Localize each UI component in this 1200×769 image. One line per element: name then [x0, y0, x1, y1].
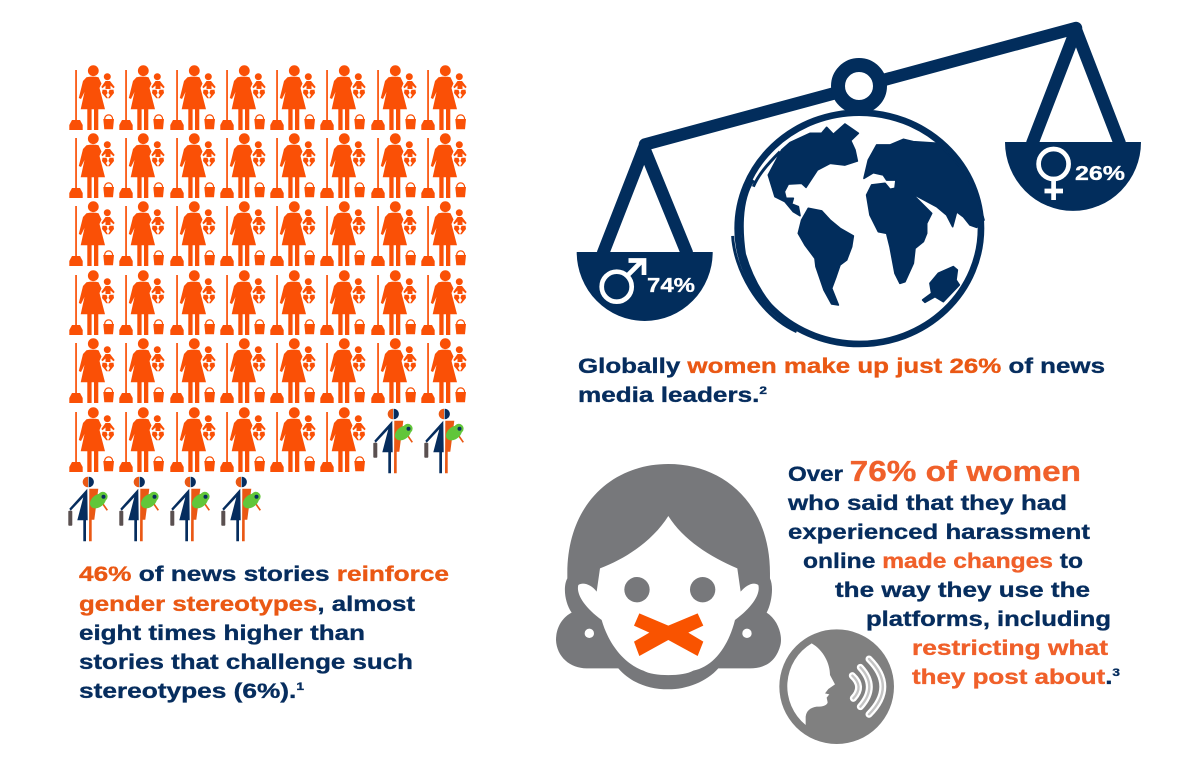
scale with globe illustration	[577, 28, 1141, 344]
male symbol	[602, 260, 644, 302]
female symbol	[1039, 149, 1069, 200]
hair and head silhouette	[556, 464, 781, 689]
text block: online harassment statistic: who said that they had	[787, 492, 1067, 515]
text block: online harassment statistic: restricting what	[912, 637, 1108, 660]
text block: online harassment statistic: platforms, including	[866, 608, 1111, 631]
text block: online harassment statistic	[787, 456, 1120, 689]
text block: news media leaders statistic: Globally women make up just 26% of news	[578, 355, 1105, 378]
label: 74%: 74%	[647, 275, 695, 297]
face	[578, 516, 759, 675]
eyes	[624, 577, 715, 602]
left pan	[577, 252, 713, 321]
text block: news media leaders statistic	[578, 355, 1105, 407]
text block: stereotypes statistic: gender stereotypes , almost	[79, 593, 415, 616]
text block: stereotypes statistic: stories that challenge such	[79, 651, 413, 674]
text block: news media leaders statistic: media leaders.	[578, 384, 724, 407]
orange tape	[634, 613, 703, 656]
text block: stereotypes statistic: 1	[296, 681, 304, 693]
icon: speaking head	[779, 629, 894, 744]
text block: stereotypes statistic	[79, 563, 449, 703]
text block: online harassment statistic: they post about .	[912, 666, 1111, 689]
text block: online harassment statistic: 3	[1112, 667, 1120, 679]
text block: news media leaders statistic: 2	[759, 385, 767, 397]
text block: online harassment statistic: Over 76% of women	[788, 456, 1081, 488]
scale beam	[645, 28, 1076, 144]
text block: online harassment statistic: experienced harassment	[788, 521, 1090, 544]
right pan	[1005, 142, 1141, 211]
icon: silenced woman with taped mouth	[556, 464, 781, 689]
pivot ring	[838, 65, 880, 107]
text block: stereotypes statistic: stereotypes (6%).	[79, 680, 253, 703]
earrings	[585, 629, 752, 638]
pictogram grid: women in domestic roles and professional women	[68, 65, 467, 541]
label: 26%: 26%	[1075, 163, 1125, 185]
left pan strings	[603, 148, 687, 254]
text block: stereotypes statistic: eight times higher than	[79, 622, 365, 645]
globe	[733, 113, 984, 344]
right pan strings	[1032, 30, 1120, 144]
text block: online harassment statistic: online made changes to	[803, 550, 1083, 573]
text block: stereotypes statistic: 46% of news stories reinforce	[79, 563, 449, 586]
text block: online harassment statistic: the way they use the	[835, 579, 1090, 602]
